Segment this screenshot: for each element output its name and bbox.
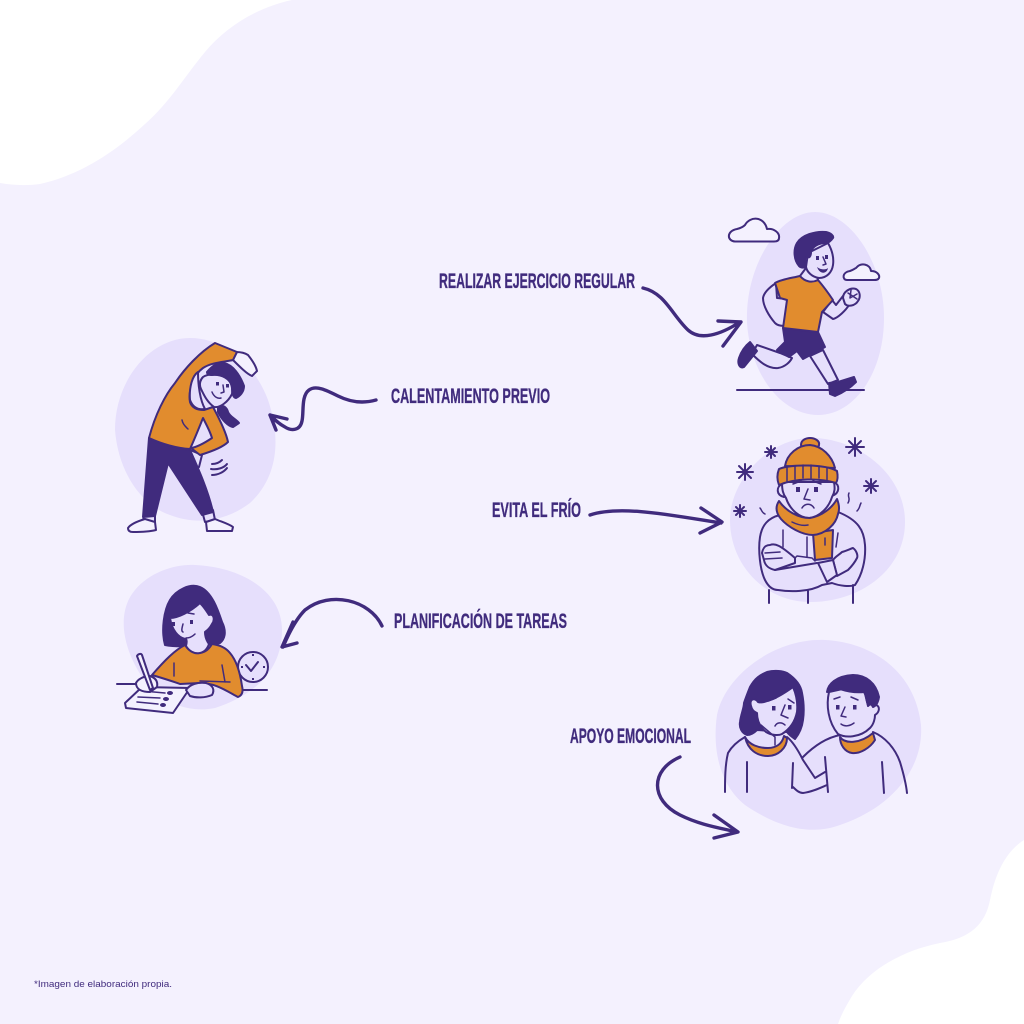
icon: small cloud bbox=[844, 264, 879, 280]
label: evita el frío: EVITA EL FRÍO bbox=[492, 499, 581, 522]
clock bbox=[238, 652, 268, 682]
scarf bbox=[777, 499, 839, 535]
illustration: woman writing bbox=[117, 565, 282, 713]
orange shirt bbox=[152, 644, 243, 697]
illustration: woman stretching bbox=[115, 338, 275, 532]
fist bbox=[843, 289, 860, 306]
shiver lines bbox=[760, 493, 861, 514]
arrow: to couple bbox=[658, 757, 738, 838]
white cuff bbox=[795, 556, 815, 561]
face details bbox=[816, 255, 828, 260]
man hair bbox=[827, 675, 879, 707]
front shoe bbox=[829, 377, 856, 396]
white corner shape: top left bbox=[0, 0, 292, 185]
sweater body bbox=[759, 512, 865, 591]
ground line bbox=[737, 389, 864, 391]
purple trousers bbox=[143, 438, 213, 517]
back arm bbox=[763, 283, 787, 326]
icon: large cloud bbox=[729, 219, 779, 242]
face details bbox=[796, 487, 818, 492]
desk line bbox=[117, 684, 267, 690]
orange top bbox=[149, 343, 237, 455]
hand on hip bbox=[190, 450, 202, 468]
right shoe bbox=[206, 519, 233, 531]
left hand bbox=[762, 544, 795, 570]
woman body lines bbox=[725, 737, 827, 793]
head bbox=[782, 482, 835, 518]
woman collar bbox=[745, 736, 787, 756]
pencil bbox=[137, 654, 153, 690]
woman face bbox=[751, 687, 797, 735]
shorts bbox=[777, 328, 825, 359]
motion lines bbox=[211, 460, 227, 475]
hat crown bbox=[785, 445, 835, 468]
left hand bbox=[136, 676, 157, 692]
notepad bbox=[125, 687, 190, 713]
woman hair bbox=[740, 671, 804, 739]
scarf tail bbox=[813, 530, 833, 560]
man body lines bbox=[803, 732, 907, 793]
illustration: person cold bbox=[730, 438, 905, 603]
hair bbox=[163, 586, 225, 646]
man face details bbox=[836, 705, 856, 710]
arrow: to writing woman bbox=[282, 599, 382, 647]
face bbox=[200, 374, 232, 407]
hair bbox=[207, 363, 244, 398]
man collar bbox=[840, 733, 875, 753]
hat brim bbox=[778, 465, 838, 485]
right hand bbox=[833, 548, 857, 576]
orange t-shirt bbox=[775, 276, 833, 332]
woman face details bbox=[772, 705, 792, 710]
sweater centre lines bbox=[783, 530, 838, 557]
neck bbox=[800, 268, 818, 282]
legs bbox=[769, 585, 853, 603]
face details bbox=[172, 620, 193, 626]
face and neck bbox=[170, 603, 214, 653]
arrow: to cold person bbox=[590, 508, 722, 533]
front leg bbox=[810, 350, 838, 384]
white corner shape: bottom right bbox=[838, 840, 1024, 1024]
label: planificación de tareas: PLANIFICACIÓN DE TAREAS bbox=[394, 609, 567, 633]
ankles bbox=[143, 510, 215, 523]
ears bbox=[778, 482, 838, 497]
illustration: couple bbox=[716, 640, 921, 830]
snowflakes bbox=[734, 438, 878, 517]
label: calentamiento previo: CALENTAMIENTO PREVIO bbox=[391, 385, 550, 408]
illustration: runner bbox=[729, 212, 884, 415]
hair bbox=[795, 232, 833, 268]
right hand bbox=[186, 683, 213, 697]
back shoe bbox=[738, 342, 757, 367]
right arm bbox=[823, 296, 849, 319]
footnote: *Imagen de elaboración propia. bbox=[34, 979, 172, 990]
back leg bbox=[752, 345, 792, 368]
label: realizar ejercicio regular: REALIZAR EJERCICIO REGULAR bbox=[439, 270, 635, 293]
head bbox=[806, 243, 833, 278]
face details bbox=[216, 382, 229, 388]
arrow: to runner bbox=[643, 288, 741, 346]
hat pompom bbox=[801, 438, 819, 448]
left shoe bbox=[128, 519, 156, 532]
raised hand bbox=[233, 352, 257, 376]
cuff bbox=[818, 560, 837, 582]
label: apoyo emocional: APOYO EMOCIONAL bbox=[570, 725, 691, 748]
ponytail bbox=[218, 405, 239, 427]
forearm lower edge bbox=[775, 563, 817, 570]
arrow: to stretching woman bbox=[270, 388, 376, 430]
upper arm skin bbox=[190, 372, 205, 409]
man head bbox=[828, 688, 879, 736]
